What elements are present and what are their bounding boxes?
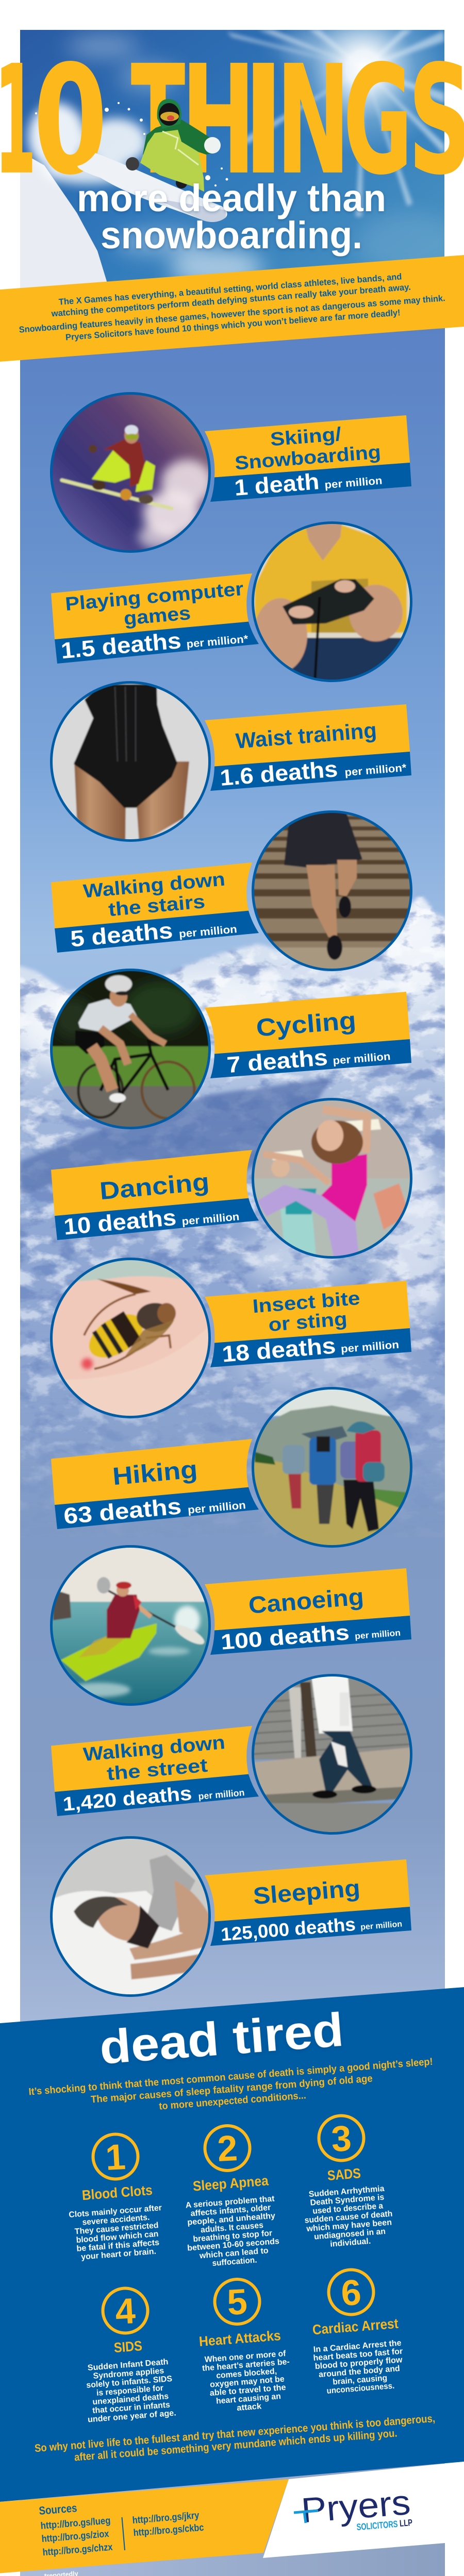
body: brain, causing [333,2374,388,2386]
item 7: insect bite or sting [48,1256,411,1420]
body: They cause restricted [74,2221,159,2236]
label text: or sting [268,1308,348,1335]
body: undiagnosed in an [314,2227,386,2242]
mountain backdrop [15,891,449,1556]
hero photo: snowboarder in blue sky [20,30,459,330]
label text: 7 deaths [226,1045,328,1078]
label text [220,1874,403,1945]
body [69,2204,165,2262]
body: your heart or brain. [81,2247,156,2262]
body: severe accidents. [82,2213,150,2227]
label text: Walking down [82,869,226,902]
item 6: dancing [51,1096,415,1261]
number ring: 2 [217,2128,239,2169]
label text: per million [198,1787,245,1802]
photo: wasp on skin [48,1256,213,1420]
heading: Heart Attacks [198,2328,281,2349]
cause 4: SIDS [84,2289,176,2424]
intro text: watching the competitors perform death defying stunts can really take your breath away. [51,282,411,318]
heading: Blood Clots [81,2182,153,2203]
item 2: playing computer games [51,519,415,689]
label text [62,1732,245,1816]
body: that occur in infants [92,2400,171,2415]
footer: logo panel [263,2462,464,2558]
body: unconsciousness. [326,2382,395,2396]
body: able to travel to the [209,2383,286,2398]
body: Sudden Infant Death [87,2358,169,2372]
dead tired intro text: to more unexpected conditions... [159,2090,306,2112]
label text [219,718,407,791]
intro text [17,268,446,346]
body [84,2357,176,2424]
body: attack [237,2402,262,2413]
label text: per million [187,1499,246,1516]
body: heart beats too fast for [313,2347,403,2363]
label banner [51,1726,252,1792]
label text: Dancing [98,1168,210,1205]
logo: Pryers Solicitors LLP: Pryers [300,2483,412,2530]
clouds [67,35,459,287]
cause 5: heart attacks [198,2279,293,2415]
label banner [51,573,252,639]
title: 10 THINGS: T [131,34,186,208]
item 9: canoeing [48,1543,411,1710]
powder spray [28,103,147,184]
number ring: 6 [340,2272,362,2313]
title: 10 THINGS: N [276,34,350,208]
body: used to describe a [312,2201,384,2216]
intro text: The X Games has everything, a beautiful setting, world class athletes, live bands, and [58,272,402,307]
label banner [51,862,252,928]
label text: Walking down [82,1732,226,1765]
number ring [214,2279,260,2324]
body: between 10-60 seconds [187,2237,280,2253]
label banner [205,1859,410,1922]
item 1: skiing / snowboarding [48,390,411,555]
body: blood flow which can [76,2230,159,2245]
title: 10 THINGS [0,34,464,208]
item 4: walking down the stairs [51,808,415,973]
label text: Snowboarding [234,441,382,474]
heading: Cardiac Arrest [312,2316,399,2337]
body: When one or more of [204,2349,287,2364]
label banner [205,1568,410,1630]
label text: 1.5 deaths [60,628,182,664]
subtitle: more deadly than snowboarding: snowboarding. [101,214,362,257]
label text: the stairs [107,891,206,920]
body: comes blocked, [216,2367,277,2380]
label text [220,1583,401,1654]
heading: SADS [327,2165,361,2183]
label text: Insect bite [252,1287,361,1317]
label text: 18 deaths [221,1333,337,1367]
label text: 1,420 deaths [62,1783,193,1816]
photo: legs on stairs [250,808,415,973]
dead tired section panel [0,1987,464,2502]
label text: Skiing/ [270,423,342,450]
label text: per million [340,1339,400,1355]
label text: per million [354,1628,401,1641]
closing statement [34,2413,437,2466]
sources text [39,2501,205,2558]
title: 10 THINGS: 0 [34,34,107,208]
item 3: waist training [48,679,411,844]
item 5: cycling [48,967,411,1132]
cause 1: blood clots [69,2134,165,2262]
label banner [51,1150,252,1216]
body: be fatal if this affects [76,2238,160,2253]
body [312,2338,406,2396]
label text: Cycling [255,1007,357,1042]
photo: man walking [250,1672,415,1839]
cause 2: sleep apnea [184,2126,281,2270]
label text: per million [333,1050,391,1067]
snowboarder figure [77,99,227,222]
body: is responsible for [96,2384,163,2398]
logo: Pryers Solicitors LLP: SOLICITORS [356,2519,398,2532]
dead tired intro text: It’s shocking to think that the most common cause of death is simply a good night’s sleep! [28,2056,433,2097]
label banner [205,1281,410,1343]
body: Clots mainly occur after [69,2204,162,2219]
body: sudden cause of death [304,2210,393,2225]
label text: 5 deaths [69,918,174,952]
number ring: 5 [226,2281,248,2323]
cause 6: cardiac arrest [312,2270,406,2396]
body: the heart’s arteries be- [202,2358,290,2373]
footer: sources band [0,2479,289,2573]
photo: hikers [250,1385,415,1550]
body: adults. It causes [201,2221,264,2234]
label text: 1 death [234,469,320,501]
label text: per million [360,1920,403,1932]
photo: cyclist [48,967,213,1132]
body: breathing to stop for [193,2229,273,2244]
label text [63,1456,246,1529]
photo: kayaker [48,1543,213,1710]
closing statement: after all it could be something very mundane which ends up killing you. [74,2427,397,2463]
sources text: Sources [39,2501,77,2517]
label text: games [123,602,191,629]
label text: the street [106,1755,208,1785]
number ring [93,2134,138,2179]
number ring [319,2115,364,2161]
number ring: 3 [330,2118,353,2159]
intro banner [0,255,464,362]
body: which may have been [306,2218,392,2233]
label text: Waist training [235,718,377,753]
item 10: walking down the street [51,1672,415,1839]
subtitle: more deadly than snowboarding [77,177,386,257]
body: affects infants, older [190,2204,271,2218]
label text [60,578,249,664]
logo: Pryers Solicitors LLP: LLP [399,2517,413,2529]
label banner [205,415,410,477]
label text [69,869,238,952]
sources text: http://bro.gs/chzx [42,2542,113,2558]
label text: per million [181,1211,240,1228]
title: 10 THINGS: G [343,34,412,208]
number ring [329,2270,373,2314]
label text: per million* [344,762,407,778]
snow slope [20,151,111,330]
label text: 10 deaths [63,1205,177,1240]
number ring [205,2126,250,2171]
title: 10 THINGS: H [181,34,255,208]
photo: game controller [250,519,415,689]
label banner [205,704,410,767]
label banner [51,1439,252,1505]
number ring: 4 [114,2291,137,2332]
title: 10 THINGS: I [243,34,284,208]
label text: 125,000 deaths [220,1913,356,1945]
label text: 100 deaths [220,1620,350,1654]
heading: SIDS [113,2338,143,2355]
body: A serious problem that [185,2194,275,2210]
intro text: Snowboarding features heavily in these games, however the sport is not as dangerous as some may think. [19,293,445,335]
label banner [205,992,410,1054]
label text: per million [178,923,238,940]
item 11: sleeping [48,1834,411,1999]
body: people, and unhealthy [187,2212,276,2227]
label text: per million* [186,633,249,650]
photo: sleeping man [48,1834,218,1999]
label text [221,1287,400,1367]
subtitle: more deadly than snowboarding: more deadly than [77,177,386,219]
number ring [103,2289,147,2333]
dead tired intro text [28,2056,435,2122]
intro text: Pryers Solicitors have found 10 things which you won’t believe are far more deadly! [65,308,401,342]
body: oxygen may not be [209,2375,285,2389]
sources text: http://bro.gs/ziox [41,2529,110,2545]
label text: Playing computer [64,578,244,615]
label text [226,1007,391,1078]
body: suffocation. [212,2256,257,2268]
body: solely to infants. SIDS [86,2375,173,2390]
body: unexplained deaths [92,2392,169,2406]
photo: snowboarder mid-air [48,390,213,555]
label text [63,1168,240,1240]
body: Death Syndrome is [310,2193,385,2208]
body: under one year of age. [87,2409,176,2424]
body: In a Cardiac Arrest the [313,2338,402,2354]
sources text: http://bro.gs/jkry [132,2510,200,2526]
body: blood to properly flow [314,2355,403,2371]
heading: dead tired: dead tired [98,2003,345,2074]
body: Syndrome applies [93,2366,164,2381]
body: Sudden Arrhythmia [308,2184,385,2199]
body [201,2349,293,2415]
label text: 63 deaths [63,1494,183,1529]
body [302,2184,395,2250]
heading: Sleep Apnea [192,2173,270,2194]
label text: Hiking [111,1456,198,1490]
sources text: http://bro.gs/lueg [40,2515,111,2532]
label text: per million [324,475,383,491]
number ring: 1 [105,2137,127,2178]
item 8: hiking [51,1385,415,1550]
label text: 1.6 deaths [219,756,339,791]
body: which can lead to [198,2246,269,2261]
body: around the body and [319,2364,400,2379]
photo: dance class [250,1096,415,1261]
body: heart causing an [216,2392,281,2406]
sun rays [227,30,444,216]
body [184,2194,281,2270]
photo: corset [48,679,213,844]
body: individual. [330,2237,371,2249]
label text [234,423,383,501]
cause 3: SADS [302,2115,395,2250]
dead tired intro text: The major causes of sleep fatality range from dying of old age [90,2073,373,2105]
label text: Sleeping [252,1874,361,1909]
sources text: http://bro.gs/ckbc [133,2522,205,2538]
label text: Canoeing [247,1583,364,1619]
